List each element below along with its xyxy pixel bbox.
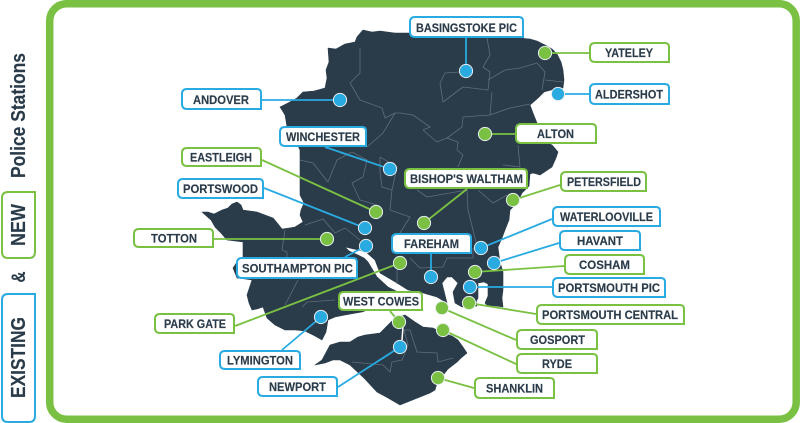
- label: Winchester: [280, 127, 366, 146]
- map of Hampshire and Isle of Wight: [202, 30, 564, 405]
- river Medina: [402, 326, 403, 340]
- label: Newport: [258, 377, 337, 396]
- label: Gosport: GOSPORT: [530, 333, 586, 347]
- label: Totton: TOTTON: [151, 232, 197, 246]
- label: Fareham: FAREHAM: [404, 237, 459, 251]
- label: Park Gate: [155, 314, 234, 333]
- label: Havant: HAVANT: [577, 234, 624, 248]
- label: Bishop's Waltham: BISHOP'S WALTHAM: [410, 172, 523, 186]
- label: Lymington: LYMINGTON: [227, 354, 293, 368]
- label: Shanklin: [475, 378, 554, 398]
- label: Cosham: COSHAM: [579, 258, 630, 272]
- label: Winchester: WINCHESTER: [286, 130, 360, 144]
- new stations: [320, 46, 552, 385]
- label: Eastleigh: EASTLEIGH: [190, 150, 252, 164]
- label: Yateley: [590, 43, 669, 62]
- label: West Cowes: WEST COWES: [343, 294, 419, 308]
- legend tab: existing: EXISTING: [8, 317, 30, 398]
- connector lines: [214, 38, 589, 388]
- label: Cosham: [565, 255, 644, 274]
- label: Portswood: [178, 179, 263, 198]
- label: Waterlooville: [553, 207, 660, 226]
- label: Ryde: [517, 354, 597, 373]
- label: Andover: [182, 89, 261, 109]
- label: Portsmouth Central: PORTSMOUTH CENTRAL: [542, 308, 678, 322]
- station markers: [314, 46, 565, 385]
- label: Basingstoke PIC: [410, 17, 523, 37]
- label: Park Gate: PARK GATE: [164, 317, 226, 331]
- label: Alton: ALTON: [537, 127, 574, 141]
- label: Shanklin: SHANKLIN: [486, 382, 543, 396]
- label: Portsmouth Central: [537, 305, 684, 324]
- label: Waterlooville: WATERLOOVILLE: [560, 210, 653, 224]
- heading: Police Stations: Police Stations: [8, 53, 30, 178]
- label: Aldershot: ALDERSHOT: [595, 88, 664, 102]
- mainland: [202, 30, 564, 340]
- label: Southampton PIC: SOUTHAMPTON PIC: [242, 262, 353, 276]
- label: Fareham: [392, 234, 471, 253]
- label: Gosport: [517, 330, 597, 349]
- label: Alton: [516, 124, 596, 143]
- existing stations: [314, 64, 565, 354]
- label: Andover: ANDOVER: [193, 93, 249, 107]
- legend tab: existing: [2, 294, 35, 422]
- label: Petersfield: [561, 172, 646, 191]
- label: Ryde: RYDE: [542, 357, 572, 371]
- label: Petersfield: PETERSFIELD: [567, 175, 641, 189]
- label: Bishop's Waltham: [405, 169, 527, 188]
- label: Eastleigh: [182, 148, 261, 166]
- label: Aldershot: [590, 84, 669, 104]
- label: Southampton PIC: [237, 258, 357, 278]
- label: Havant: [560, 231, 640, 250]
- label: Lymington: [220, 351, 300, 369]
- legend tab: new: [2, 192, 35, 258]
- label: Portsmouth PIC: [553, 278, 665, 297]
- district boundaries: [282, 38, 563, 372]
- label: Totton: [134, 229, 213, 247]
- label: Portswood: PORTSWOOD: [183, 182, 258, 196]
- ampersand: &: [9, 271, 30, 282]
- label: Newport: NEWPORT: [269, 380, 327, 394]
- legend tab: new: NEW: [8, 204, 30, 246]
- Isle of Wight: [315, 315, 467, 405]
- label: Portsmouth PIC: PORTSMOUTH PIC: [558, 281, 660, 295]
- label: Basingstoke PIC: BASINGSTOKE PIC: [416, 21, 517, 35]
- label: Yateley: YATELEY: [605, 46, 653, 60]
